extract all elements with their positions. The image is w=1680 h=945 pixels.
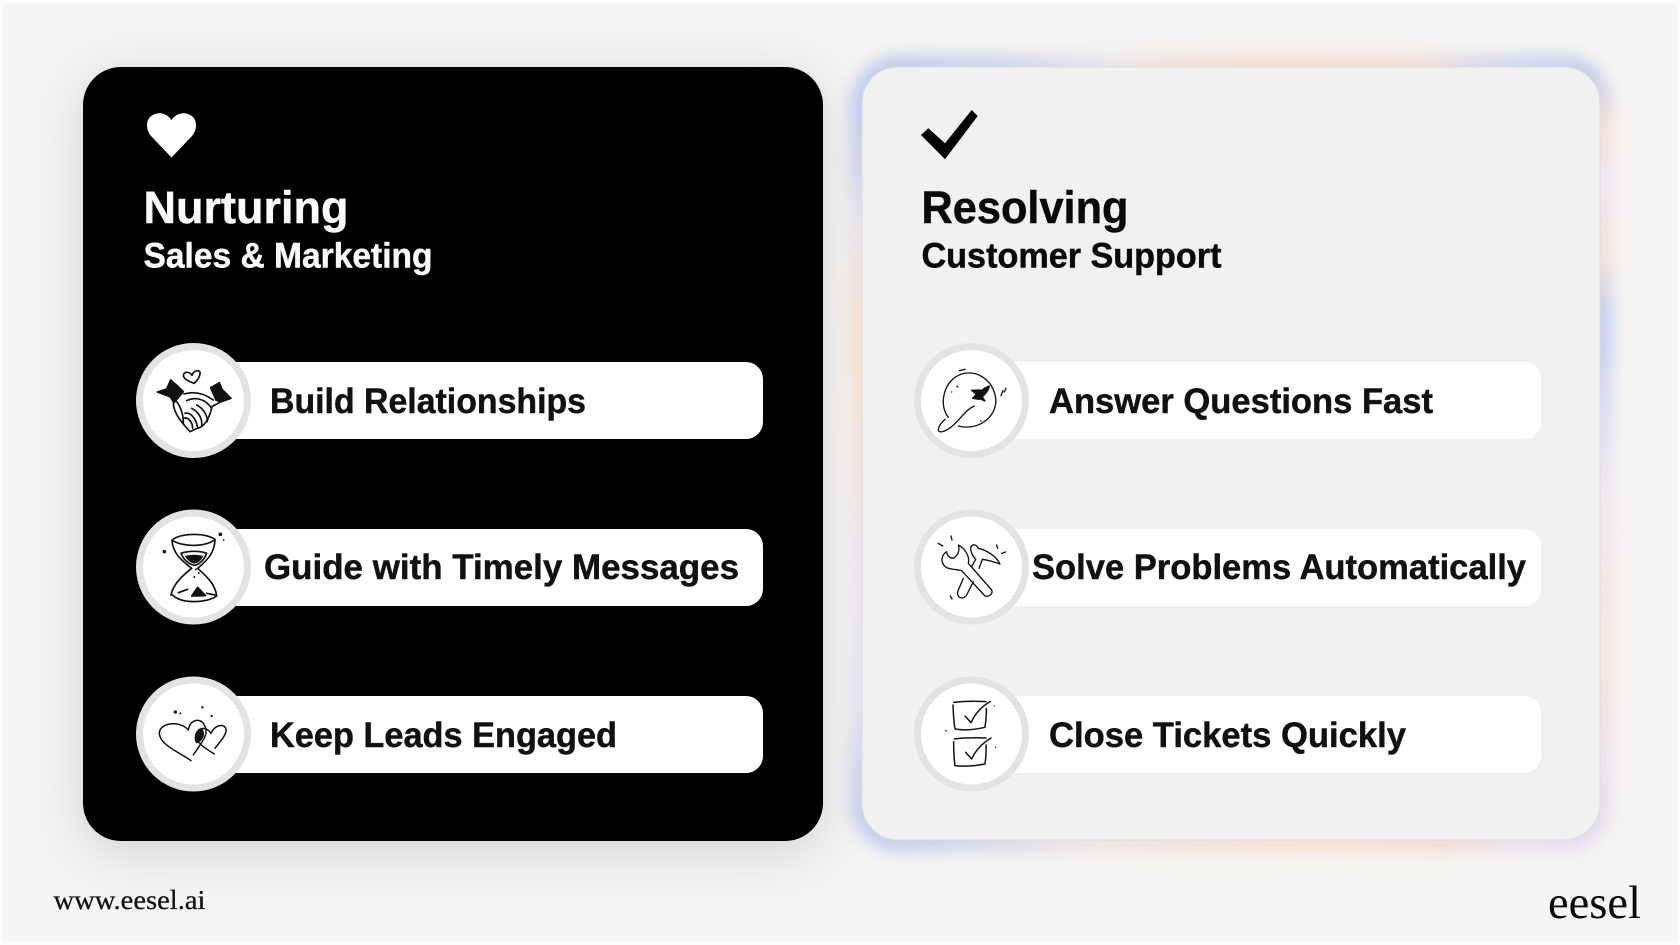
subheading: Sales & Marketing: Sales & Marketing [144,236,432,276]
icon: heart [147,113,196,158]
row: guide with timely messages [140,513,763,621]
icon: two hearts [159,706,226,761]
label: Answer Questions Fast: Answer Questions Fast [1049,382,1433,421]
label: Solve Problems Automatically: Solve Problems Automatically [1032,548,1527,587]
heading: Resolving: Resolving [922,182,1128,233]
icon: plane circling globe [938,369,1006,432]
subheading: Customer Support: Customer Support [922,236,1222,276]
label: Build Relationships: Build Relationships [270,382,586,421]
icon: holding hands [157,371,231,432]
panel: resolving, customer support [843,48,1620,860]
label: Keep Leads Engaged: Keep Leads Engaged [270,716,617,755]
label: Close Tickets Quickly: Close Tickets Quickly [1049,716,1407,755]
icon: wrench and hammer [938,536,1006,599]
icon: checked boxes [945,701,996,766]
row: solve problems automatically [918,513,1541,621]
footer: website url: www.eesel.ai [54,885,206,915]
icon: hourglass [162,532,224,602]
label: Guide with Timely Messages: Guide with Timely Messages [264,548,739,587]
heading: Nurturing: Nurturing [144,182,348,233]
panel: nurturing, sales and marketing [83,67,823,852]
row: keep leads engaged [140,680,763,788]
row: build relationships [140,346,763,454]
icon: check mark [921,110,978,159]
footer: eesel logo: eesel [1548,877,1641,929]
row: close tickets quickly [918,680,1541,788]
row: answer questions fast [918,346,1541,454]
